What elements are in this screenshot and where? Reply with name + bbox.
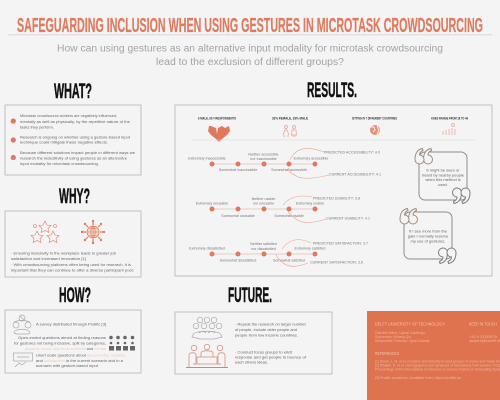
bullet: workers negatively influenced: mentally as well as physically, by the repetitive nature of the [20, 119, 131, 124]
text: RESULTS. [307, 79, 357, 102]
scale: satisfaction: Somewhat satisfied [273, 258, 305, 262]
quote: gain: If I see more from the [409, 228, 448, 234]
scale: satisfaction: CURRENT SATISFACTION: 3.6 [310, 260, 363, 264]
quote: gain: gain I normally reserve [408, 234, 449, 238]
scale: usability: Neither usable [252, 197, 275, 201]
scale: accessibility: nor inaccessible [250, 157, 277, 161]
scale: usability: Extremely usable [296, 202, 324, 206]
text: contact: +31 6 12345678 [469, 335, 497, 339]
text: short-scale questions: and satisfaction in the current scenario and in a [36, 358, 124, 363]
stat: gender split [272, 116, 308, 137]
text: why reasons [11, 250, 134, 272]
text: university: Responsible Professor: Ujwal Gadiraju [375, 339, 430, 343]
quote: seen or heard: heard by nearby people [422, 172, 465, 178]
text: why reasons: satisfaction and increased innovation [1] [11, 256, 86, 261]
text: open-ended questions: Open-ended questions aimed at finding reasons [18, 335, 106, 340]
text: repeat research: people from low income countries. [235, 332, 298, 338]
scale: accessibility: Somewhat inaccessible [219, 168, 257, 172]
panel: what [5, 105, 141, 175]
bullet: workers negatively influenced: Microtask crowdsource workers are negatively influenced, [20, 113, 117, 118]
text: short-scale questions: Likert scale questions about accessibility, usability, [36, 352, 126, 358]
text: references [375, 351, 500, 380]
text: contact [469, 322, 500, 343]
bullet: ongoing research [11, 134, 131, 144]
scale: satisfaction: Extremely satisfied [295, 246, 325, 250]
panel: why [5, 211, 141, 277]
quote: gain [400, 208, 456, 264]
icon: globe network [81, 220, 105, 244]
icon: people grid [109, 336, 135, 350]
stat: gender split: 33% FEMALE, 33% MALE [272, 116, 308, 120]
bullet: different solutions: Because different solutions impact people in different ways we [20, 150, 136, 155]
scale: usability: nor unusable [253, 202, 274, 206]
stat: ages [431, 116, 468, 135]
text: HOW? [59, 284, 91, 307]
scale: usability: Somewhat usable [274, 214, 304, 218]
stat: ages: AGES RANGE FROM 18 TO 46 [431, 116, 468, 120]
icon: crowd [192, 317, 222, 339]
stat: countries: SITTING IN 7 DIFFERENT COUNTRIES [352, 116, 397, 120]
subtitle question: lead to the exclusion of different groups? [156, 57, 345, 68]
scale: satisfaction: nor dissatisfied [251, 247, 276, 251]
stat: respondents [198, 116, 236, 142]
subtitle question [57, 44, 443, 68]
scale: usability: Extremely unusable [196, 202, 228, 206]
bullet: ongoing research: Research is ongoing on whether using a gesture-based input [20, 134, 131, 140]
bullet: ongoing research: technique could mitigate these negative effects. [20, 140, 108, 144]
text: why reasons: · Ensuring inclusivity in the workplace leads to greater job [11, 250, 117, 256]
text: university: Supervisor: Sihang Qiu [375, 335, 411, 339]
scale: usability: Somewhat unusable [221, 214, 255, 218]
text: references: REFERENCES [375, 351, 399, 356]
bullet: different solutions: research the inclusitivity of using gestures as an alternative [20, 156, 128, 160]
text: references: [3] Prolific academic. Available from: https://prolific.ac [375, 376, 461, 380]
scale: accessibility: Somewhat accessible [271, 168, 307, 172]
quote: seen or heard: used. [438, 182, 448, 187]
scale: accessibility: PREDICTED ACCESSIBILITY: 4.0 [324, 150, 380, 154]
text: short-scale questions [36, 352, 126, 368]
heading: what: WHAT? [54, 80, 92, 103]
subtitle question: How can using gestures as an alternative input modality for microtask crowdsourcing [57, 44, 443, 54]
text: short-scale questions: scenario with gesture-based input [36, 363, 99, 368]
scale: usability: CURRENT USABILITY: 4.1 [326, 216, 370, 220]
scale: accessibility: Extremely accessible [294, 156, 328, 160]
scale: accessibility: Extremely inaccessible [188, 156, 226, 160]
heading: why: WHY? [59, 185, 90, 208]
scale: usability [196, 196, 370, 222]
quote: seen or heard: It might be seen or [426, 168, 460, 172]
quote: gain: my use of gestures. [411, 238, 445, 244]
text: open-ended questions: physical, social, and environmental and mental [25, 346, 106, 351]
icon: survey crowd [13, 315, 31, 334]
scale: satisfaction: PREDICTED SATISFACTION: 3.7 [313, 242, 368, 246]
bullet: workers negatively influenced [11, 113, 131, 130]
bullet: different solutions [11, 150, 136, 166]
text: contact: student@tudelft.nl [469, 339, 500, 343]
scale: satisfaction: Neither satisfied [250, 242, 277, 246]
quote: seen or heard [415, 148, 470, 204]
text: focus groups [235, 350, 307, 364]
scale: satisfaction: Somewhat dissatisfied [220, 258, 256, 262]
panel: how [5, 310, 141, 373]
stat: respondents: 6 MALE, 69 # RESPONDENTS [198, 116, 236, 120]
text: open-ended questions: for gestures not being inclusive, split by categories, [14, 340, 106, 346]
text: open-ended questions [14, 335, 106, 351]
text: FUTURE. [228, 284, 272, 307]
text: focus groups: each others ideas. [235, 360, 268, 364]
text: focus groups: response and get people to bounce of [235, 354, 307, 360]
icon: stars [31, 221, 59, 242]
text: why reasons: · With crowdsourcing platforms often being used for research, it is [11, 262, 131, 267]
panel: results [175, 105, 492, 276]
text: why reasons: important that they can continue to offer a diverse participant pool. [11, 268, 134, 272]
text: focus groups: · Conduct focus groups to elicit [235, 350, 293, 354]
scale: accessibility: CURRENT ACCESSIBILITY: 4.1 [329, 172, 381, 176]
scale: satisfaction [189, 240, 368, 266]
bullet: different solutions: input modality for microtask crowdsourcing. [20, 161, 99, 166]
text: repeat research: of people, include older people and [235, 327, 297, 332]
text: repeat research: · Repeat the research on larger number [235, 322, 307, 326]
panel: future [175, 312, 332, 374]
icon: focus group [186, 344, 228, 368]
stat: countries [352, 116, 397, 135]
panel: footer [367, 311, 500, 400]
scale: satisfaction: Extremely dissatisfied [189, 246, 225, 250]
text: university: DELFT UNIVERSITY OF TECHNOLOGY [375, 322, 445, 326]
scale: accessibility: Neither accessible [248, 152, 279, 156]
text: university [375, 322, 445, 343]
text: survey: A survey distributed through Prolific [3] [36, 322, 106, 326]
quote: seen or heard: when this method is [425, 177, 461, 182]
text: repeat research [235, 322, 307, 338]
text: university: Garrett Allen, Ujwal Gadiraju [375, 331, 425, 335]
scale: usability: PREDICTED USABILITY: 3.8 [313, 196, 360, 200]
scale: accessibility [188, 148, 381, 178]
bullet: workers negatively influenced: tasks they perform. [20, 124, 54, 130]
icon: question form [14, 353, 32, 367]
